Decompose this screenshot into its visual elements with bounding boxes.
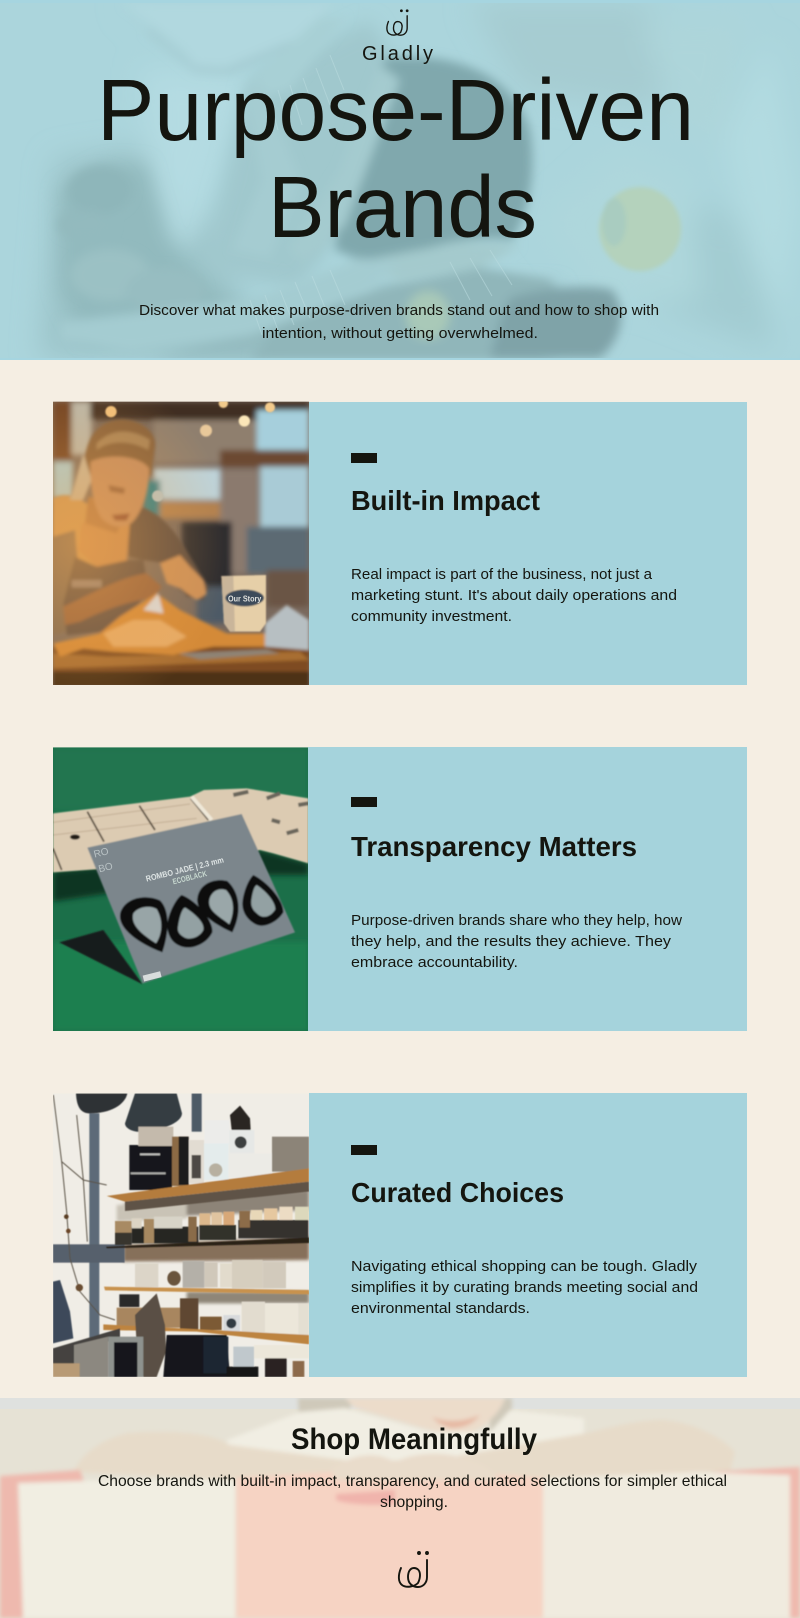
heading: Transparency Matters	[351, 831, 637, 862]
table	[53, 647, 309, 687]
title: Purpose-Driven	[97, 62, 694, 159]
card brand mark: BO	[97, 861, 114, 875]
brand name: Gladly	[362, 43, 433, 65]
footer photo: woman with shopping bags	[0, 1398, 800, 1618]
bottom shelf goods	[242, 1302, 265, 1332]
panel: hero header	[0, 0, 800, 360]
title: Brands	[268, 159, 537, 256]
middle shelf goods	[115, 1232, 132, 1245]
photo: shop shelves	[53, 1093, 309, 1377]
lower dark goods	[163, 1335, 230, 1377]
net	[380, 244, 508, 276]
panel: Transparency Matters	[53, 747, 747, 1031]
teal text panel	[308, 747, 747, 1031]
mug	[221, 575, 266, 632]
flap and shadow	[59, 930, 143, 984]
shirt	[127, 505, 208, 600]
hero top edge band	[0, 0, 800, 360]
top shelf goods	[129, 1145, 172, 1190]
body text: community investment.	[351, 608, 512, 625]
mug label: Our Story	[228, 594, 262, 603]
center pink bag	[236, 1472, 543, 1618]
guitar neck	[53, 788, 308, 872]
shoulders and sleeve	[53, 494, 94, 566]
card	[87, 814, 295, 983]
avocado	[335, 57, 532, 270]
card label	[146, 858, 224, 884]
window shadows	[89, 1113, 99, 1340]
logo: footer mark	[399, 1552, 428, 1587]
body text	[351, 912, 682, 971]
lemon	[599, 187, 681, 271]
framed items	[53, 1328, 120, 1377]
body text: Purpose-driven brands share who they help, how	[351, 912, 682, 929]
hero description: intention, without getting overwhelmed.	[262, 325, 538, 342]
panel: Shop Meaningfully footer	[0, 1398, 800, 1618]
teal text panel	[309, 402, 747, 685]
heading: Built-in Impact	[351, 485, 540, 516]
card brand mark: RO	[93, 846, 110, 861]
card label: ECOBLACK	[172, 869, 208, 886]
footer text: shopping.	[380, 1494, 448, 1511]
card label: ROMBO JADE | 2.3 mm	[145, 855, 225, 884]
body text: marketing stunt. It's about daily operations and	[351, 587, 677, 604]
photo: artisan sewing in a cafe	[53, 399, 309, 687]
accent dash	[351, 797, 377, 807]
neck	[86, 496, 118, 532]
face	[90, 457, 149, 527]
arms	[74, 1420, 735, 1480]
accent dash	[351, 453, 377, 463]
hands	[330, 1454, 500, 1480]
face	[345, 1398, 505, 1435]
hero photo: mesh bag on fabric	[0, 3, 800, 358]
card brand mark	[94, 848, 112, 872]
picks	[120, 875, 283, 952]
body text	[351, 1258, 698, 1317]
footer heading: Shop Meaningfully	[291, 1423, 537, 1456]
forearms	[63, 573, 162, 625]
hero description	[139, 302, 659, 342]
body text: embrace accountability.	[351, 954, 518, 971]
teal text panel	[309, 1093, 747, 1377]
heading: Curated Choices	[351, 1177, 564, 1208]
straps	[337, 66, 402, 230]
panel: Built-in Impact	[53, 399, 747, 687]
apron	[63, 557, 148, 635]
title	[97, 62, 694, 256]
middle shelf board	[106, 1238, 309, 1248]
chest	[96, 524, 132, 568]
footer text	[98, 1473, 727, 1511]
right bag	[543, 1472, 790, 1618]
lower shelf board	[104, 1287, 309, 1294]
panel: Curated Choices	[53, 1093, 747, 1377]
fringe texture	[250, 55, 512, 335]
body text: Navigating ethical shopping can be tough. Gladly	[351, 1258, 698, 1275]
body text: Real impact is part of the business, not just a	[351, 566, 653, 583]
cloth	[265, 605, 309, 650]
dark lower object	[490, 287, 621, 358]
body text: they help, and the results they achieve. They	[351, 933, 672, 950]
hair	[298, 1398, 352, 1445]
red backing bags	[0, 1470, 90, 1618]
body text	[351, 566, 677, 625]
hero description: Discover what makes purpose-driven brands stand out and how to shop with	[139, 302, 659, 319]
body text: simplifies it by curating brands meeting social and	[351, 1279, 698, 1296]
hair	[83, 419, 155, 480]
warm light glow	[53, 402, 221, 685]
walnut mass	[74, 168, 98, 184]
body text: environmental standards.	[351, 1300, 530, 1317]
basket	[135, 1293, 166, 1377]
fabric	[53, 593, 265, 657]
shirt	[227, 1408, 584, 1470]
top shelf board	[107, 1168, 309, 1202]
vines	[53, 1095, 115, 1320]
logo: Gladly mark	[387, 10, 408, 35]
accent dash	[351, 1145, 377, 1155]
collar fold	[123, 3, 333, 72]
footer text: Choose brands with built-in impact, transparency, and curated selections for simpler ethical	[98, 1473, 727, 1490]
left bag	[18, 1480, 235, 1618]
lower shelf goods	[135, 1263, 158, 1287]
photo: guitar picks on a card	[53, 747, 308, 1031]
